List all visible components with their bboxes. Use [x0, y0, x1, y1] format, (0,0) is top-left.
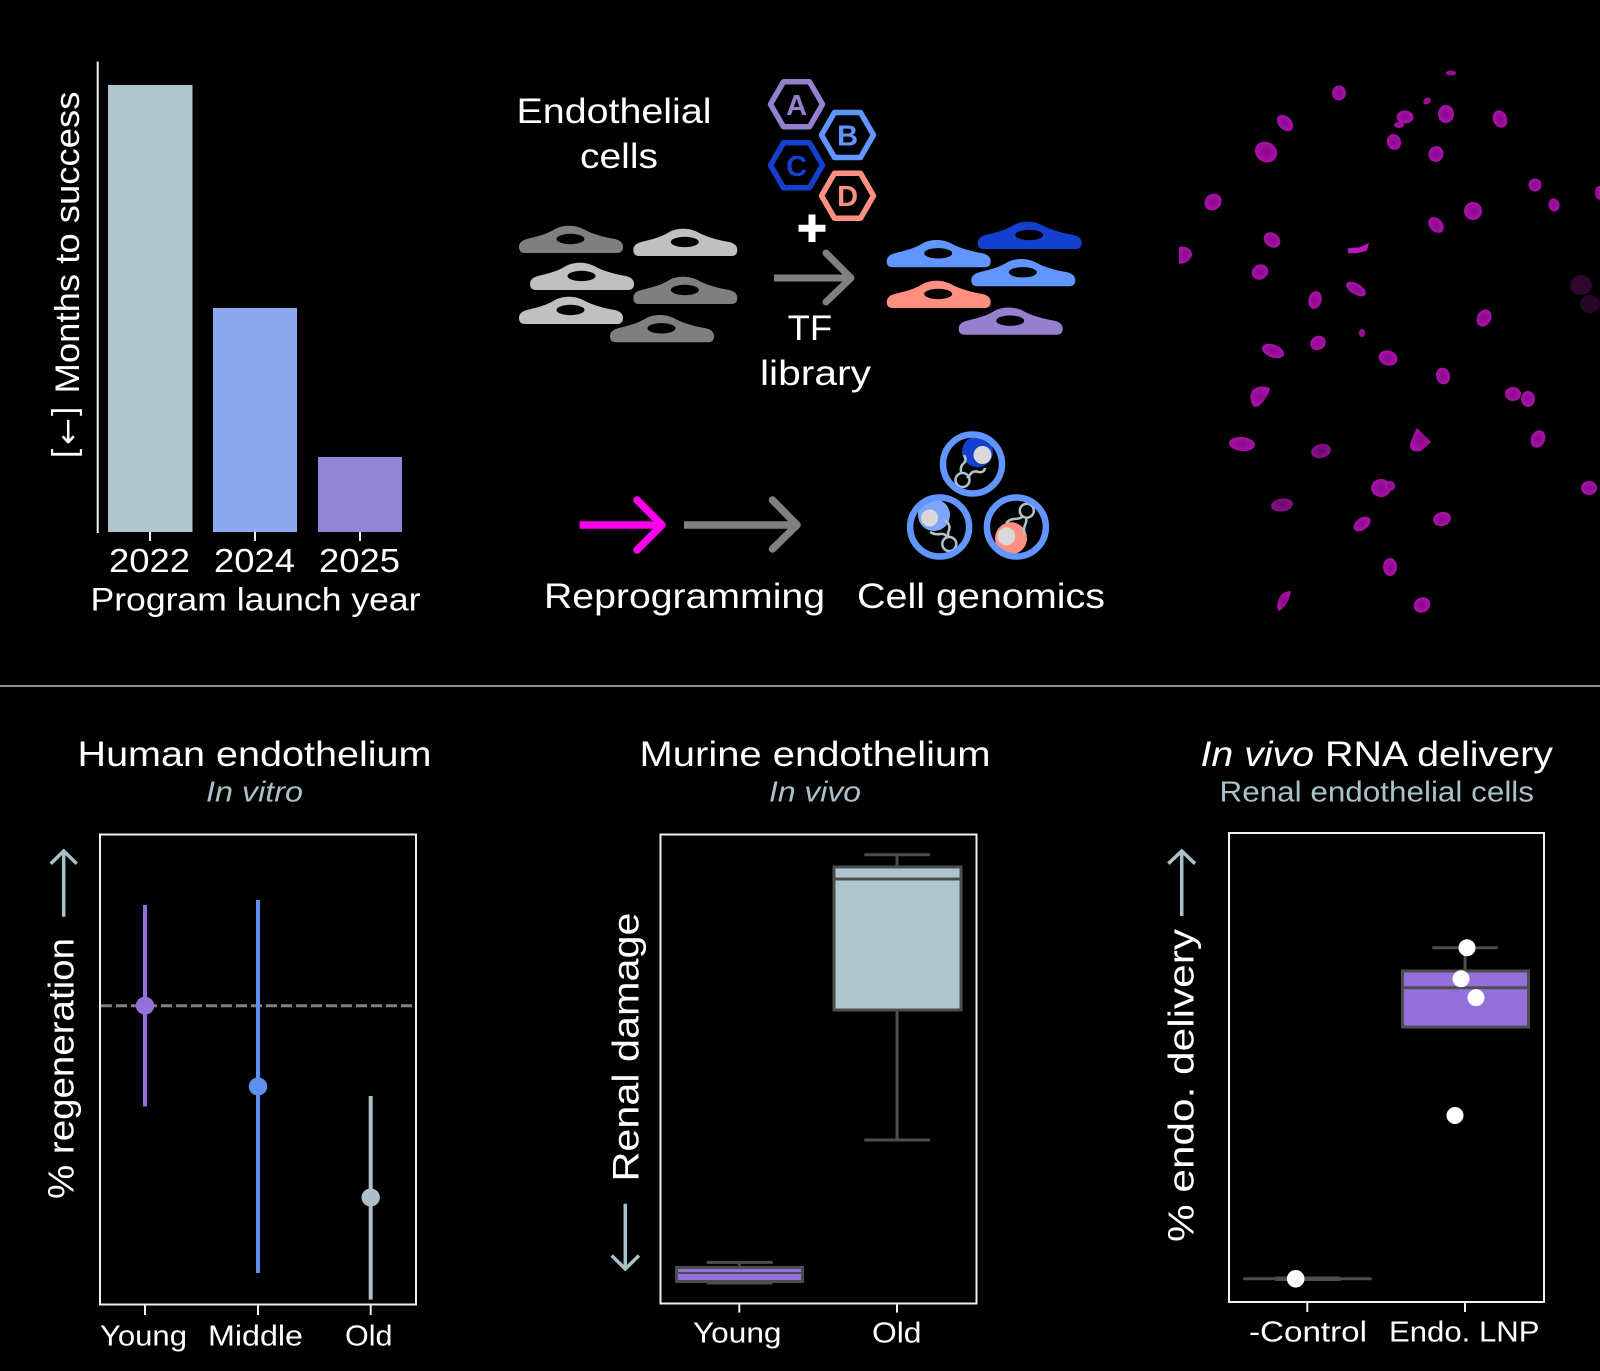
- heading: endothelial cells: cells: [580, 137, 658, 176]
- y axis title: ]: [45, 407, 82, 416]
- icon: unprogrammed cells: [519, 226, 737, 342]
- icon: TF library hexagons: A: [786, 90, 807, 122]
- label: TF library: [760, 309, 872, 393]
- y label: % endo. delivery: [1160, 929, 1201, 1242]
- label: TF library: TF: [788, 309, 832, 348]
- title: RNA delivery: [1325, 735, 1554, 774]
- icon: TF library hexagons: C: [786, 151, 807, 183]
- bar: 2022: [108, 85, 192, 532]
- y label: Renal damage: [605, 912, 646, 1182]
- arrow: TF library: [774, 253, 851, 302]
- x labels: Endo. LNP: [1389, 1317, 1540, 1349]
- x labels: Old: [872, 1317, 922, 1349]
- icon: plus: [798, 214, 826, 242]
- data points: [1287, 939, 1484, 1288]
- x tick labels: 2024: [214, 542, 295, 579]
- x tick labels: 2025: [319, 542, 400, 579]
- micrograph: magenta nuclei: [1179, 70, 1600, 616]
- title: Murine endothelium: [640, 735, 990, 774]
- y label: % regeneration: [40, 938, 81, 1199]
- x labels: [1249, 1317, 1540, 1349]
- icon: TF library hexagons: D: [837, 181, 858, 213]
- arrow: up: [1168, 851, 1195, 916]
- box plot: control: [1243, 1277, 1372, 1280]
- bar: 2024: [213, 308, 297, 532]
- label: reprogramming: Reprogramming: [544, 577, 825, 616]
- title: Human endothelium: [78, 735, 431, 774]
- box plot: endo LNP: [1402, 948, 1528, 1027]
- icon: single-cell droplets: [910, 434, 1046, 556]
- y axis title: [: [45, 449, 82, 458]
- subtitle: In vitro: [206, 777, 303, 809]
- arrow: magenta reprogramming: [580, 500, 662, 550]
- y axis title: Months to success: [49, 92, 87, 394]
- bar: 2025: [318, 457, 402, 532]
- arrow: down: [612, 1204, 639, 1269]
- label: TF library: library: [760, 354, 872, 393]
- x labels: Young: [100, 1320, 187, 1352]
- x labels: [100, 1320, 392, 1352]
- bar chart: months to success: [45, 62, 421, 618]
- x labels: -Control: [1249, 1317, 1367, 1349]
- panel: in vivo RNA delivery: [1160, 735, 1554, 1349]
- icon: TF library hexagons: [770, 82, 874, 218]
- arrow: up: [51, 851, 77, 917]
- subtitle: Renal endothelial cells: [1220, 777, 1534, 809]
- x labels: Young: [693, 1317, 782, 1349]
- x axis title: Program launch year: [90, 582, 421, 618]
- x labels: Middle: [208, 1320, 303, 1352]
- point range: middle: [249, 900, 267, 1273]
- box plot: old: [834, 855, 961, 1140]
- panel: murine endothelium: [605, 735, 990, 1349]
- x tick labels: 2022: [109, 542, 190, 579]
- arrow: gray to genomics: [684, 500, 797, 549]
- x tick labels: [109, 542, 400, 579]
- heading: endothelial cells: [516, 92, 712, 176]
- label: cell genomics: Cell genomics: [857, 577, 1105, 616]
- y axis title: [45, 92, 87, 458]
- icon: TF library hexagons: B: [837, 120, 858, 152]
- heading: endothelial cells: Endothelial: [516, 92, 712, 131]
- title: [1200, 735, 1554, 774]
- point range: old: [362, 1096, 380, 1300]
- panel: human endothelium: [40, 735, 432, 1352]
- x labels: Old: [345, 1320, 392, 1352]
- title: In vivo: [1200, 735, 1314, 774]
- subtitle: In vivo: [769, 777, 861, 809]
- y axis title: ←: [50, 418, 86, 445]
- box plot: young: [676, 1262, 802, 1283]
- icon: reprogrammed cells: [887, 222, 1082, 335]
- point range: young: [136, 905, 154, 1106]
- x labels: [693, 1317, 922, 1349]
